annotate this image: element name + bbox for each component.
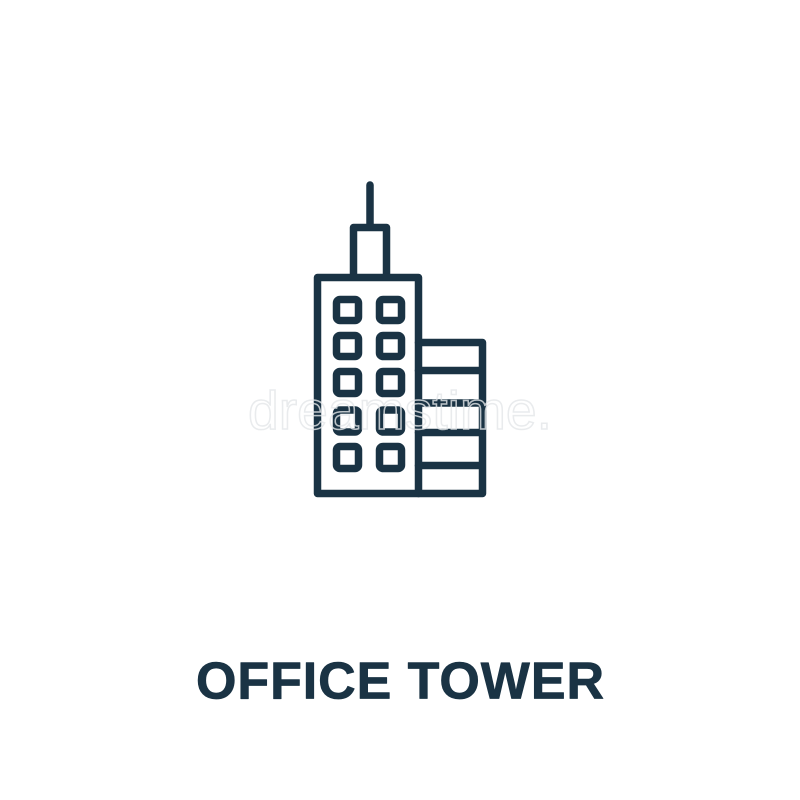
watermark: dreamstime. (248, 381, 552, 441)
side wing with floors (418, 342, 482, 494)
title: OFFICE TOWER (196, 652, 604, 710)
tower top section (354, 228, 386, 277)
icon: office tower (318, 185, 482, 494)
antenna (366, 185, 374, 227)
windows (336, 300, 402, 468)
main building (318, 278, 418, 494)
